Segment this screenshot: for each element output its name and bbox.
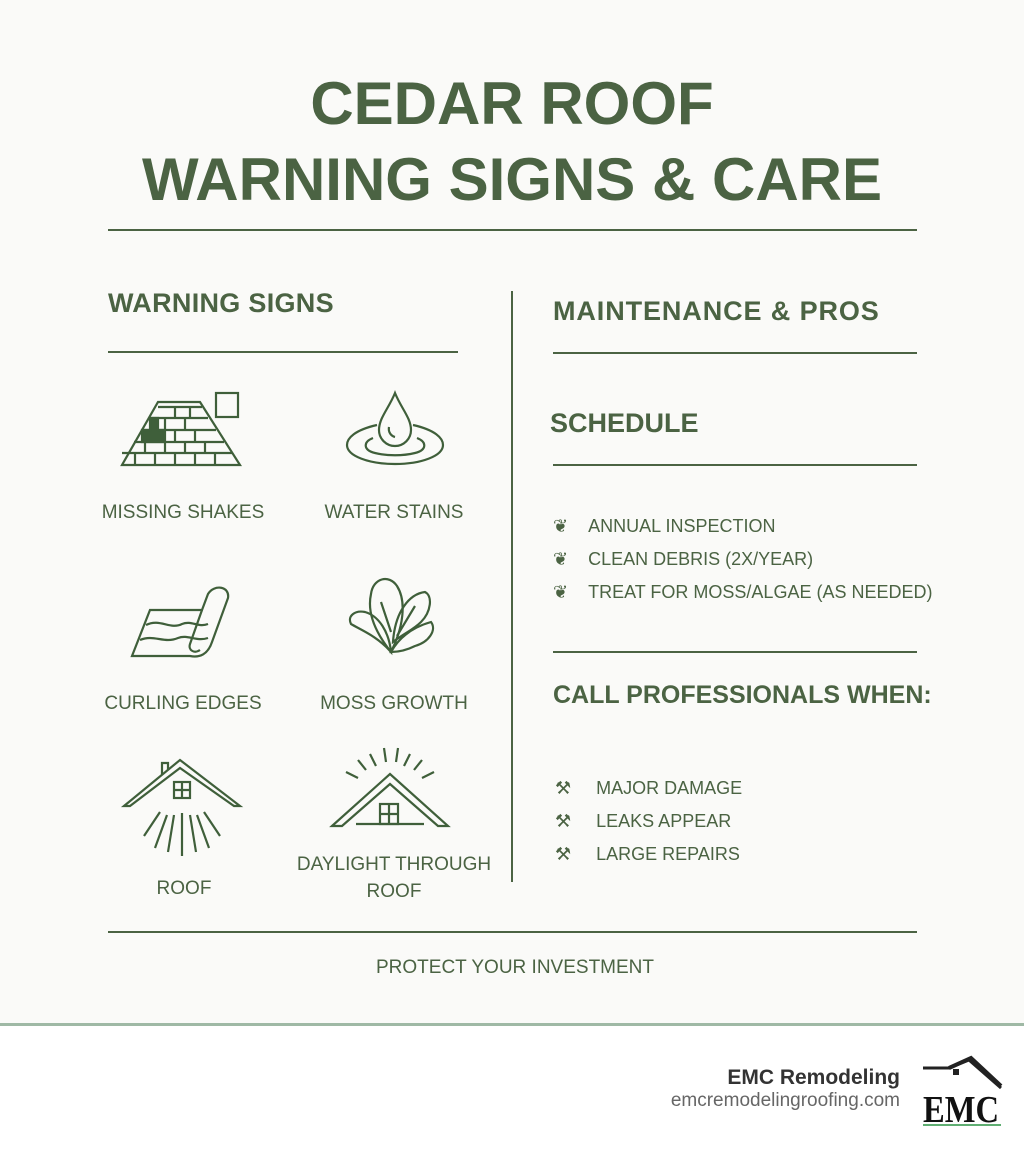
- list: schedule: [553, 516, 932, 602]
- label: water stains: WATER STAINS: [324, 502, 463, 523]
- logo: EMC: [923, 1089, 999, 1131]
- heading: schedule: SCHEDULE: [550, 408, 699, 438]
- label: curling edges: CURLING EDGES: [104, 693, 262, 714]
- label: roof: ROOF: [157, 878, 211, 899]
- icon: daylight through roof: [329, 748, 451, 828]
- label: missing shakes: MISSING SHAKES: [102, 502, 264, 523]
- title: CEDAR ROOF: [310, 70, 714, 137]
- label: daylight through roof: [297, 854, 491, 902]
- panel: maintenance & pros: [550, 296, 932, 864]
- icon: curling edges: [130, 586, 230, 658]
- title: [142, 70, 882, 213]
- brand text: EMC Remodeling: [727, 1066, 900, 1089]
- label: daylight through roof: ROOF: [367, 881, 421, 902]
- label: daylight through roof: DAYLIGHT THROUGH: [297, 854, 491, 875]
- panel: warning signs: [102, 288, 491, 902]
- icon: missing shakes: [120, 392, 242, 466]
- list: schedule: ❦ CLEAN DEBRIS (2X/YEAR): [553, 549, 813, 569]
- list: call professionals: [555, 778, 742, 864]
- icon: moss growth: [348, 578, 434, 656]
- list: schedule: ❦ ANNUAL INSPECTION: [553, 516, 775, 536]
- title: WARNING SIGNS & CARE: [142, 146, 882, 213]
- footer tagline: PROTECT YOUR INVESTMENT: [376, 957, 654, 978]
- heading: call professionals: CALL PROFESSIONALS WHEN:: [553, 681, 932, 709]
- list: call professionals: ⚒ LARGE REPAIRS: [555, 844, 740, 864]
- brand text: [671, 1066, 900, 1111]
- label: moss growth: MOSS GROWTH: [320, 693, 468, 714]
- list: call professionals: ⚒ LEAKS APPEAR: [555, 811, 731, 831]
- icon: water stains: [346, 390, 444, 466]
- brand text: emcremodelingroofing.com: [671, 1090, 900, 1111]
- icon: roof: [121, 758, 244, 856]
- heading: maintenance & pros: MAINTENANCE & PROS: [553, 296, 880, 326]
- list: schedule: ❦ TREAT FOR MOSS/ALGAE (AS NEEDED): [553, 582, 932, 602]
- heading: warning signs: WARNING SIGNS: [108, 288, 334, 318]
- logo: [923, 1056, 1002, 1131]
- list: call professionals: ⚒ MAJOR DAMAGE: [555, 778, 742, 798]
